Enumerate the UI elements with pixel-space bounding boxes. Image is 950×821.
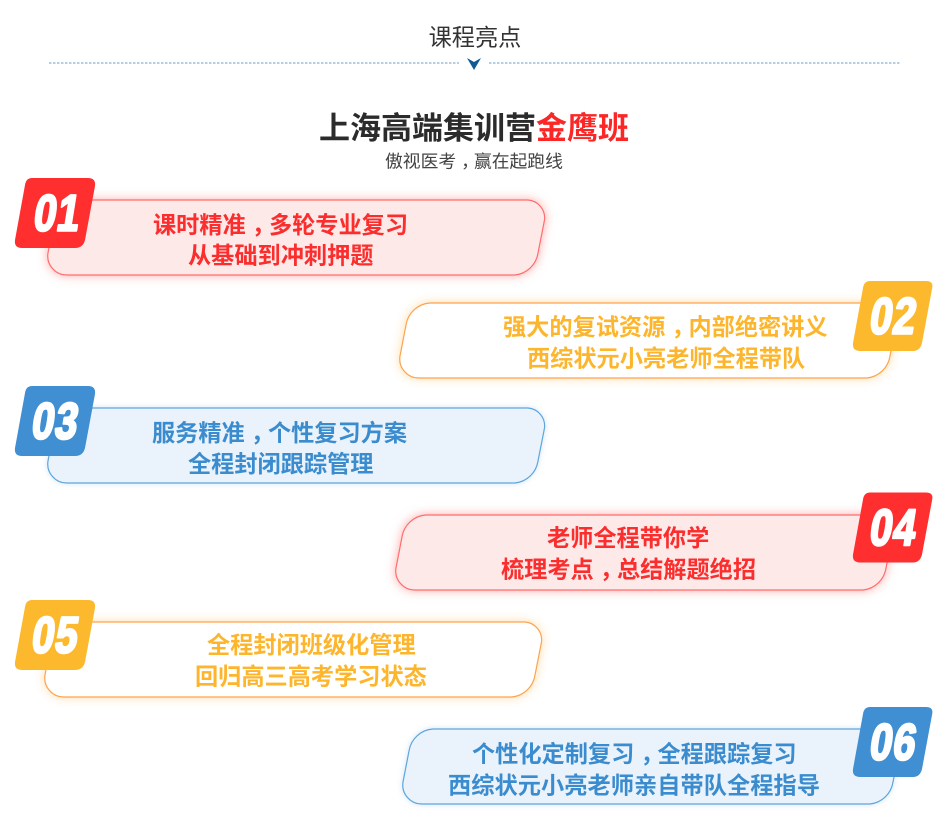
panel background 03 xyxy=(48,408,545,483)
panel background 01 xyxy=(48,200,545,275)
badge 05: 05 xyxy=(28,606,84,664)
panel: 06 xyxy=(403,707,932,804)
text 02: 西综状元小亮老师全程带队 xyxy=(527,346,805,372)
badge 06 xyxy=(853,707,932,777)
panel background 05 xyxy=(45,622,542,697)
badge 01: 01 xyxy=(30,184,86,242)
icon: down arrow xyxy=(467,58,481,70)
subtitle: 傲视医考 ，赢在起跑线 xyxy=(385,150,563,172)
text 04: 梳理考点 ，总结解题绝招 xyxy=(501,556,756,582)
panel background 02 xyxy=(400,303,897,378)
badge 02: 02 xyxy=(866,287,922,345)
badge 01 xyxy=(15,178,95,248)
text 02: 强大的复试资源 ，内部绝密讲义 xyxy=(503,314,828,340)
badge 06: 06 xyxy=(866,713,922,771)
panel background 06 xyxy=(403,729,900,804)
text 06: 个性化定制复习 ，全程跟踪复习 xyxy=(472,741,797,767)
panel: 05 xyxy=(15,600,542,697)
section heading xyxy=(49,24,900,70)
text 04: 老师全程带你学 xyxy=(547,525,709,551)
badge 02 xyxy=(853,281,932,351)
badge 03 xyxy=(15,386,95,456)
badge 05 xyxy=(15,600,95,670)
panel: 03 xyxy=(15,386,545,483)
text 03: 服务精准 ，个性复习方案 xyxy=(152,420,407,446)
text 05: 全程封闭班级化管理 xyxy=(207,632,416,658)
badge 04 xyxy=(853,492,932,562)
panel: 04 xyxy=(396,492,932,590)
badge 04: 04 xyxy=(866,499,922,556)
panel: 01 xyxy=(15,178,545,275)
text 03: 全程封闭跟踪管理 xyxy=(188,451,374,477)
title: 上海高端集训营金鹰班 xyxy=(319,111,629,146)
section heading: 课程亮点 xyxy=(429,24,521,50)
text 06: 西综状元小亮老师亲自带队全程指导 xyxy=(448,772,820,798)
text 05: 回归高三高考学习状态 xyxy=(195,664,427,690)
badge 03: 03 xyxy=(28,392,84,450)
text 01: 课时精准 ，多轮专业复习 xyxy=(153,212,408,238)
panel: 02 xyxy=(400,281,932,378)
text 01: 从基础到冲刺押题 xyxy=(188,242,374,268)
panel background 04 xyxy=(396,515,893,590)
